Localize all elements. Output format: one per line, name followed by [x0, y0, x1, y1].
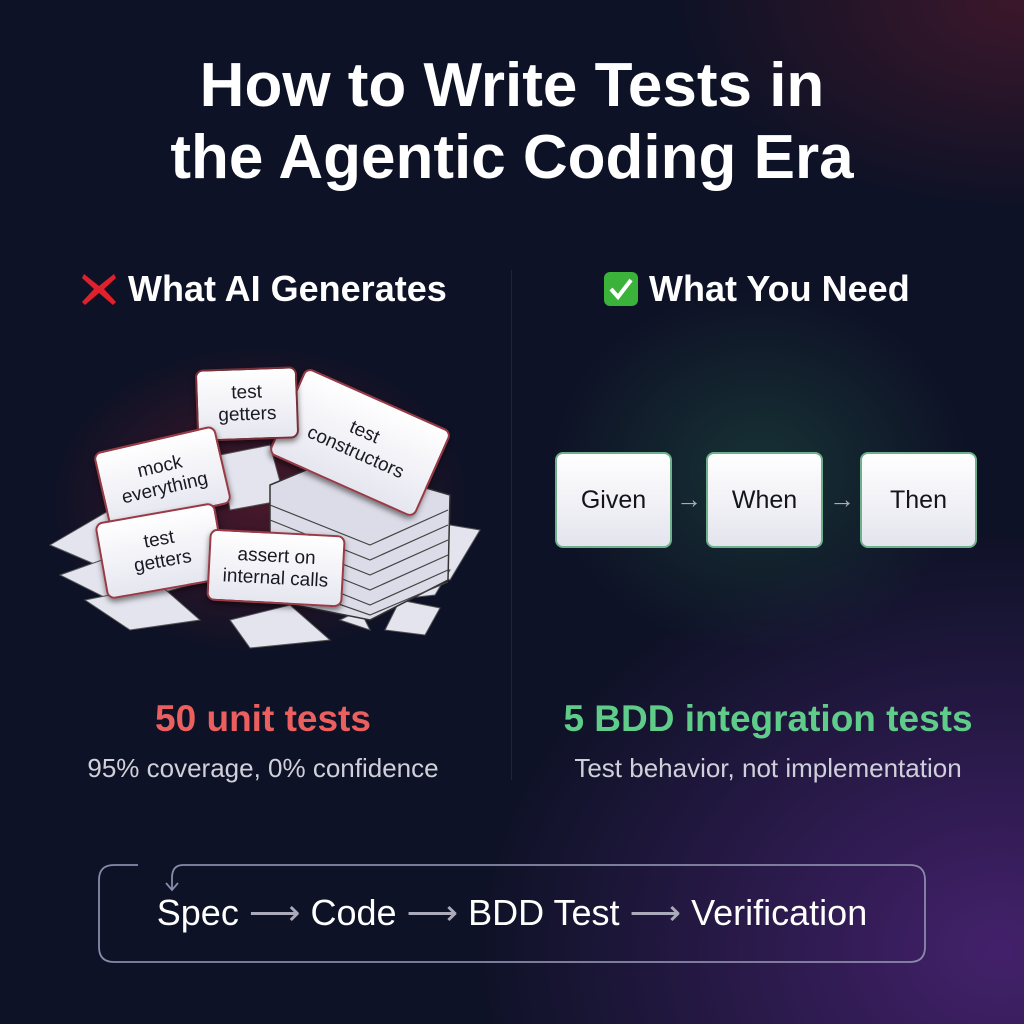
- card: assert on internal calls: [206, 528, 346, 608]
- workflow text: Spec ⟶ Code ⟶ BDD Test ⟶ Verification: [157, 892, 867, 933]
- card: mock everything: everything: [120, 468, 210, 508]
- arrow: →: [676, 484, 702, 514]
- card: test getters bottom: [94, 502, 228, 600]
- heading: what AI generates: What AI Generates: [128, 268, 447, 309]
- stat: 5 BDD integration tests: 5 BDD integration tests: [563, 698, 973, 739]
- card: assert on internal calls: assert on: [237, 544, 316, 569]
- divider: [511, 270, 512, 780]
- card: test getters bottom: getters: [132, 546, 193, 577]
- workflow loop box: [98, 864, 926, 963]
- box: when: [706, 452, 823, 548]
- card: assert on internal calls: internal calls: [222, 565, 329, 592]
- box: given: [555, 452, 672, 548]
- arrow: →: [829, 484, 855, 514]
- title: [170, 51, 854, 192]
- box: given: Given: [581, 486, 646, 514]
- card: mock everything: mock: [135, 451, 184, 482]
- title: the Agentic Coding Era: [170, 123, 854, 192]
- box: when: When: [732, 486, 797, 514]
- card: test constructors: constructors: [304, 421, 407, 483]
- box: then: [860, 452, 977, 548]
- stat: 50 unit tests: 50 unit tests: [155, 698, 371, 739]
- card: test getters top: test: [231, 381, 262, 404]
- card: mock everything: [93, 425, 232, 531]
- card: test getters bottom: test: [142, 527, 176, 553]
- card: test constructors: [268, 367, 452, 518]
- card: test constructors: test: [346, 416, 383, 448]
- heading: what you need: What You Need: [649, 268, 910, 309]
- title: How to Write Tests in: [200, 51, 824, 120]
- subtitle: coverage: 95% coverage, 0% confidence: [87, 753, 439, 783]
- card: test getters top: [195, 366, 299, 442]
- box: then: Then: [890, 486, 947, 514]
- card: test getters top: getters: [218, 403, 277, 426]
- subtitle: behavior: Test behavior, not implementation: [574, 753, 962, 783]
- illustration: pile of test cards: [49, 366, 481, 648]
